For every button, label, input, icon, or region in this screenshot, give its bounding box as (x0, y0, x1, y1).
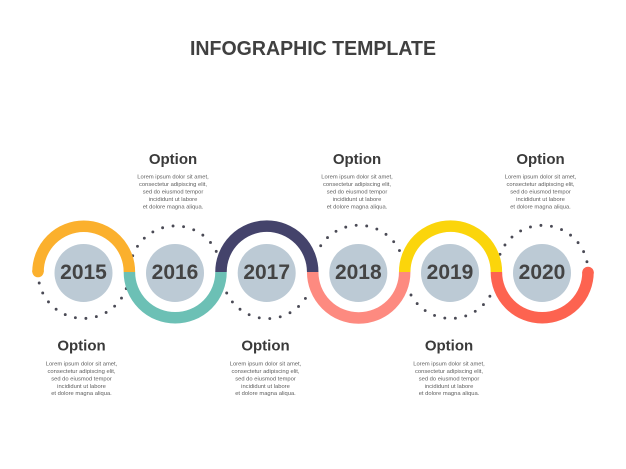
option: 2019 bottom: incididunt ut labore (425, 384, 473, 390)
option: 2019 bottom: consectetur adipiscing elit, (415, 369, 483, 375)
option: 2016 top: consectetur adipiscing elit, (139, 182, 207, 188)
option: 2015 bottom: Option (57, 338, 106, 354)
year 2016: 2016 (152, 261, 198, 284)
dotted ring: 2015 (39, 283, 127, 318)
option: 2019 bottom (413, 338, 485, 397)
option: 2015 bottom: sed do eiusmod tempor (51, 376, 112, 382)
option: 2017 bottom: Lorem ipsum dolor sit amet, (230, 362, 302, 368)
option: 2016 top: Option (149, 151, 197, 168)
year 2019 (421, 244, 479, 302)
year 2018: 2018 (335, 261, 382, 284)
year 2015 (54, 244, 112, 302)
arc: 2020 red (496, 267, 594, 318)
option: 2018 top: incididunt ut labore (333, 197, 381, 203)
option: 2019 bottom: et dolore magna aliqua. (419, 391, 480, 397)
option: 2017 bottom (230, 338, 302, 397)
option: 2015 bottom: consectetur adipiscing elit, (48, 369, 116, 375)
option: 2016 top: sed do eiusmod tempor (143, 190, 203, 196)
option: 2018 top: consectetur adipiscing elit, (323, 182, 391, 188)
year 2018 (329, 244, 387, 302)
year 2017 (238, 244, 296, 302)
dotted ring: 2018 (321, 225, 401, 254)
option: 2015 bottom: incididunt ut labore (57, 384, 106, 390)
year 2020: 2020 (519, 261, 565, 284)
option: 2017 bottom: et dolore magna aliqua. (235, 391, 296, 397)
option: 2016 top (137, 151, 209, 210)
option: 2016 top: et dolore magna aliqua. (143, 204, 204, 210)
timeline (32, 225, 594, 319)
year 2017: 2017 (243, 261, 290, 284)
option: 2017 bottom: incididunt ut labore (241, 384, 290, 390)
option: 2020 top: Lorem ipsum dolor sit amet, (505, 175, 577, 181)
dotted ring: 2016 (133, 226, 217, 256)
option: 2020 top (505, 151, 577, 210)
year 2020 (513, 244, 571, 302)
title: INFOGRAPHIC TEMPLATE (190, 37, 436, 60)
arc: 2016 teal (129, 272, 221, 318)
arc: 2017 navy (221, 226, 313, 272)
option: 2016 top: Lorem ipsum dolor sit amet, (137, 175, 209, 181)
year 2015: 2015 (60, 261, 107, 284)
year 2019: 2019 (427, 261, 473, 284)
option: 2020 top: consectetur adipiscing elit, (506, 182, 575, 188)
option: 2020 top: incididunt ut labore (516, 197, 565, 203)
option: 2019 bottom: Option (425, 338, 473, 354)
arc: 2019 yellow (405, 226, 496, 272)
option: 2018 top: Option (333, 151, 381, 168)
option: 2016 top: incididunt ut labore (149, 197, 197, 203)
option: 2018 top (321, 151, 393, 210)
dotted ring: 2020 (500, 225, 588, 265)
option: 2018 top: Lorem ipsum dolor sit amet, (321, 175, 393, 181)
option: 2019 bottom: sed do eiusmod tempor (419, 376, 479, 382)
option: 2019 bottom: Lorem ipsum dolor sit amet, (413, 362, 485, 368)
dotted ring: 2017 (227, 293, 306, 319)
option: 2015 bottom (46, 338, 118, 397)
option: 2015 bottom: et dolore magna aliqua. (51, 391, 112, 397)
option: 2018 top: sed do eiusmod tempor (327, 190, 387, 196)
option: 2020 top: sed do eiusmod tempor (510, 190, 571, 196)
year 2016 (146, 244, 204, 302)
option: 2018 top: et dolore magna aliqua. (327, 204, 388, 210)
option: 2017 bottom: sed do eiusmod tempor (235, 376, 296, 382)
option: 2020 top: et dolore magna aliqua. (510, 204, 571, 210)
option: 2015 bottom: Lorem ipsum dolor sit amet, (46, 362, 118, 368)
option: 2017 bottom: Option (241, 338, 290, 354)
option: 2017 bottom: consectetur adipiscing elit, (232, 369, 300, 375)
arc: 2015 orange (32, 226, 129, 277)
arc: 2018 pink (313, 272, 405, 318)
dotted ring: 2019 (411, 295, 490, 318)
option: 2020 top: Option (516, 151, 565, 168)
